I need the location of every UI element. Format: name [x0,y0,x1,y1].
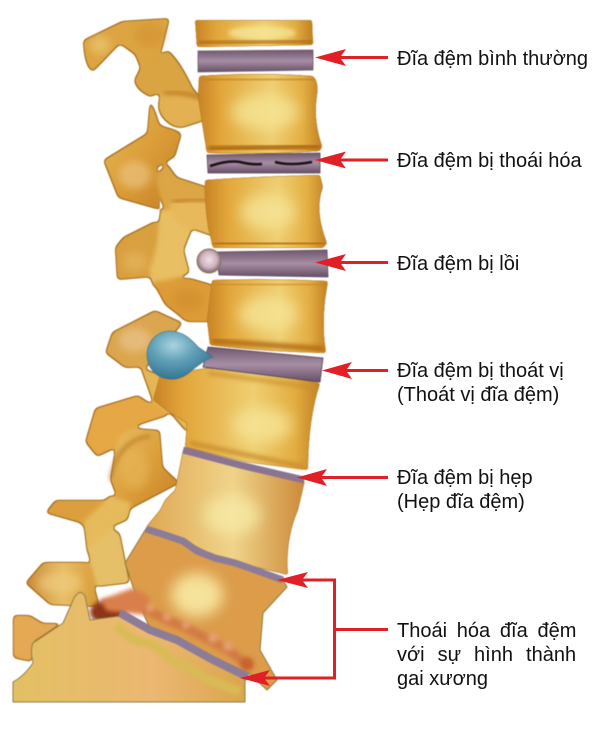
degenerated disc [207,153,320,173]
bracket arrows: bone spurs [240,572,388,686]
label: bone spurs: Thoái hóa đĩa đệm [397,620,576,642]
degenerated disc upper [146,529,283,580]
arrow: normal disc [315,49,388,66]
sacrum rim [116,626,240,692]
degenerated disc lower [120,613,248,677]
arrow: narrowed disc [297,469,388,486]
herniated disc [147,331,323,382]
label: normal disc: Đĩa đệm bình thường [397,48,588,70]
posterior shading [38,23,208,593]
vertebra highlight [171,573,223,617]
label: narrowed disc: (Hẹp đĩa đệm) [397,491,525,513]
label: narrowed disc: Đĩa đệm bị hẹp [397,467,533,489]
dark shadow under spur [90,600,126,624]
label: bone spurs: với sự hình thành [397,644,576,666]
label: degenerated disc: Đĩa đệm bị thoái hóa [397,150,582,172]
normal disc [198,50,313,72]
bone spurs [100,588,254,671]
bulging disc [197,249,328,277]
arrow: degenerated disc [315,152,388,168]
arrow: bulging disc [315,254,388,271]
vertebra shading [190,26,326,535]
label: herniated disc: Đĩa đệm bị thoát vị [397,360,564,382]
arrow: herniated disc [322,362,388,379]
label: bulging disc: Đĩa đệm bị lồi [397,253,519,275]
vertebral bodies [146,20,328,575]
sacrum [13,592,245,702]
label: herniated disc: (Thoát vị đĩa đệm) [397,384,559,406]
vertebra with osteophytes [125,527,287,690]
label: bone spurs: gai xương [397,668,488,690]
posterior elements: processes [13,18,214,662]
spine illustration [13,18,328,702]
narrowed disc [183,450,304,480]
